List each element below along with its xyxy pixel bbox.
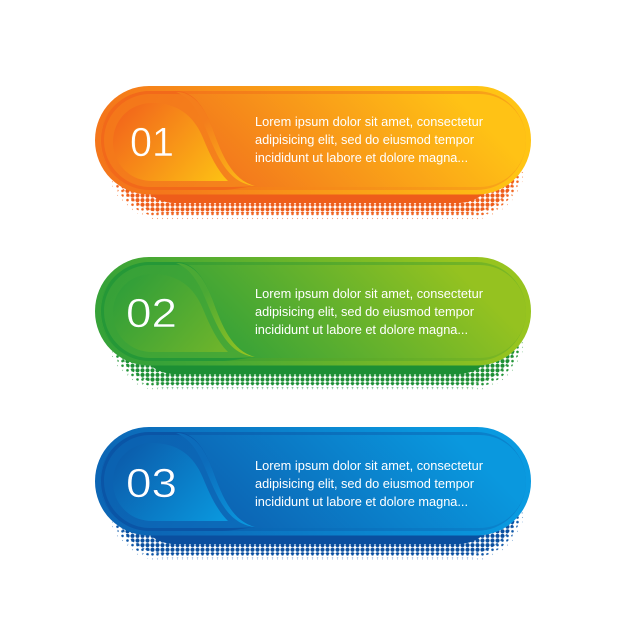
text block 02: adipisicing elit, sed do eiusmod tempor	[255, 304, 475, 319]
halftone shadow 03	[108, 451, 525, 561]
teardrop badge 01	[101, 91, 255, 190]
pill body 02	[95, 257, 531, 366]
number 02: 02	[126, 290, 177, 336]
halftone shadow 01	[108, 110, 525, 220]
text block 03: adipisicing elit, sed do eiusmod tempor	[255, 476, 475, 491]
teardrop badge 03	[101, 432, 255, 531]
text block 02: incididunt ut labore et dolore magna...	[255, 322, 468, 337]
halftone shadow 02	[108, 281, 525, 391]
pill body 03	[95, 427, 531, 536]
text block 01: Lorem ipsum dolor sit amet, consectetur	[255, 114, 484, 129]
panel: step 02 green	[95, 257, 531, 391]
pill body 01	[95, 86, 531, 194]
panel: step 01 orange	[95, 86, 531, 220]
number 03: 03	[126, 460, 177, 506]
panel: step 03 blue	[95, 427, 531, 561]
number 01: 01	[130, 119, 174, 165]
text block 03: Lorem ipsum dolor sit amet, consectetur	[255, 458, 484, 473]
text block 01	[255, 114, 484, 165]
text block 02: Lorem ipsum dolor sit amet, consectetur	[255, 286, 484, 301]
text block 02	[255, 286, 484, 337]
text block 01: incididunt ut labore et dolore magna...	[255, 150, 468, 165]
text block 03	[255, 458, 484, 509]
text block 03: incididunt ut labore et dolore magna...	[255, 494, 468, 509]
text block 01: adipisicing elit, sed do eiusmod tempor	[255, 132, 475, 147]
teardrop badge 02	[101, 262, 255, 361]
